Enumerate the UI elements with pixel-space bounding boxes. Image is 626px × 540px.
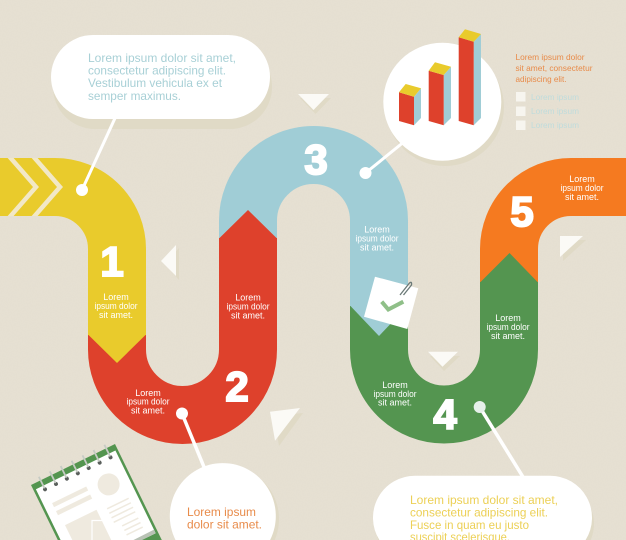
callout: circle bottom centre: dolor sit amet. — [187, 518, 262, 532]
legend: Lorem ipsum — [531, 107, 579, 116]
text on yellow segment: Lorem — [103, 292, 129, 302]
number 2: 2 — [225, 363, 249, 410]
text on blue segment: sit amet. — [360, 242, 394, 252]
text on blue segment: Lorem — [364, 224, 390, 234]
callout: top left bubble: Vestibulum vehicula ex et — [88, 76, 223, 90]
number 4: 4 — [433, 391, 457, 438]
text on red bottom segment: Lorem — [135, 388, 161, 398]
legend intro text: Lorem ipsum dolor — [516, 52, 585, 62]
callout: bubble bottom right: Lorem ipsum dolor sit amet, — [410, 493, 558, 507]
road segment 4: green — [379, 253, 538, 414]
text on green left segment: ipsum dolor — [374, 389, 416, 399]
direction triangle: left — [161, 245, 179, 280]
text on orange segment: ipsum dolor — [560, 183, 604, 193]
text on red right segment: ipsum dolor — [226, 302, 270, 312]
sticky note with check and paperclip — [364, 277, 418, 329]
icon: check mark — [382, 302, 403, 310]
text on red bottom segment: ipsum dolor — [126, 396, 170, 406]
road segment 5: orange — [509, 187, 626, 300]
callout: bubble bottom right: consectetur adipiscing elit. — [410, 506, 548, 520]
text on blue segment: ipsum dolor — [356, 234, 398, 244]
legend intro text: sit amet, consectetur — [516, 63, 593, 73]
text on red right segment: sit amet. — [231, 310, 265, 320]
legend: Lorem ipsum — [531, 93, 579, 102]
number 5: 5 — [510, 188, 534, 235]
callout: top left bubble: Lorem ipsum dolor sit amet, — [88, 51, 236, 65]
callout: circle bottom centre — [170, 408, 279, 540]
road segment 2: red — [117, 210, 277, 415]
direction triangle: lower centre — [428, 352, 460, 371]
callout: bubble bottom right — [373, 401, 594, 540]
text on yellow segment: ipsum dolor — [94, 301, 138, 311]
notebook — [31, 444, 162, 540]
bar chart — [399, 29, 481, 125]
number 3: 3 — [304, 136, 328, 183]
callout: bubble bottom right: Fusce in quam eu justo — [410, 518, 529, 532]
direction triangle: bottom — [270, 408, 303, 446]
text on yellow segment: sit amet. — [99, 310, 133, 320]
text on orange segment: Lorem — [569, 174, 595, 184]
text on orange segment: sit amet. — [565, 192, 599, 202]
text on green right segment: Lorem — [495, 313, 521, 323]
chevrons on road start — [8, 155, 60, 219]
number 1: 1 — [100, 238, 124, 285]
text on green right segment: sit amet. — [491, 331, 525, 341]
legend — [516, 92, 579, 130]
road segment 1: yellow — [0, 187, 146, 363]
callout: top left bubble — [51, 35, 272, 196]
road segment 3: blue — [248, 155, 408, 336]
callout: top left bubble: consectetur adipiscing elit. — [88, 64, 226, 78]
legend intro text: adipiscing elit. — [516, 74, 566, 84]
callout: bar chart circle — [360, 29, 504, 179]
text on green left segment: Lorem — [382, 380, 408, 390]
text on green left segment: sit amet. — [378, 398, 412, 408]
legend: Lorem ipsum — [531, 121, 579, 130]
direction triangle: top — [298, 94, 331, 114]
text on red right segment: Lorem — [235, 292, 261, 302]
icon: paperclip — [400, 282, 412, 295]
text on green right segment: ipsum dolor — [486, 322, 530, 332]
direction triangle: right — [560, 236, 586, 261]
callout: top left bubble: semper maximus. — [88, 89, 181, 103]
text on red bottom segment: sit amet. — [131, 406, 165, 416]
callout: circle bottom centre: Lorem ipsum — [187, 505, 256, 519]
